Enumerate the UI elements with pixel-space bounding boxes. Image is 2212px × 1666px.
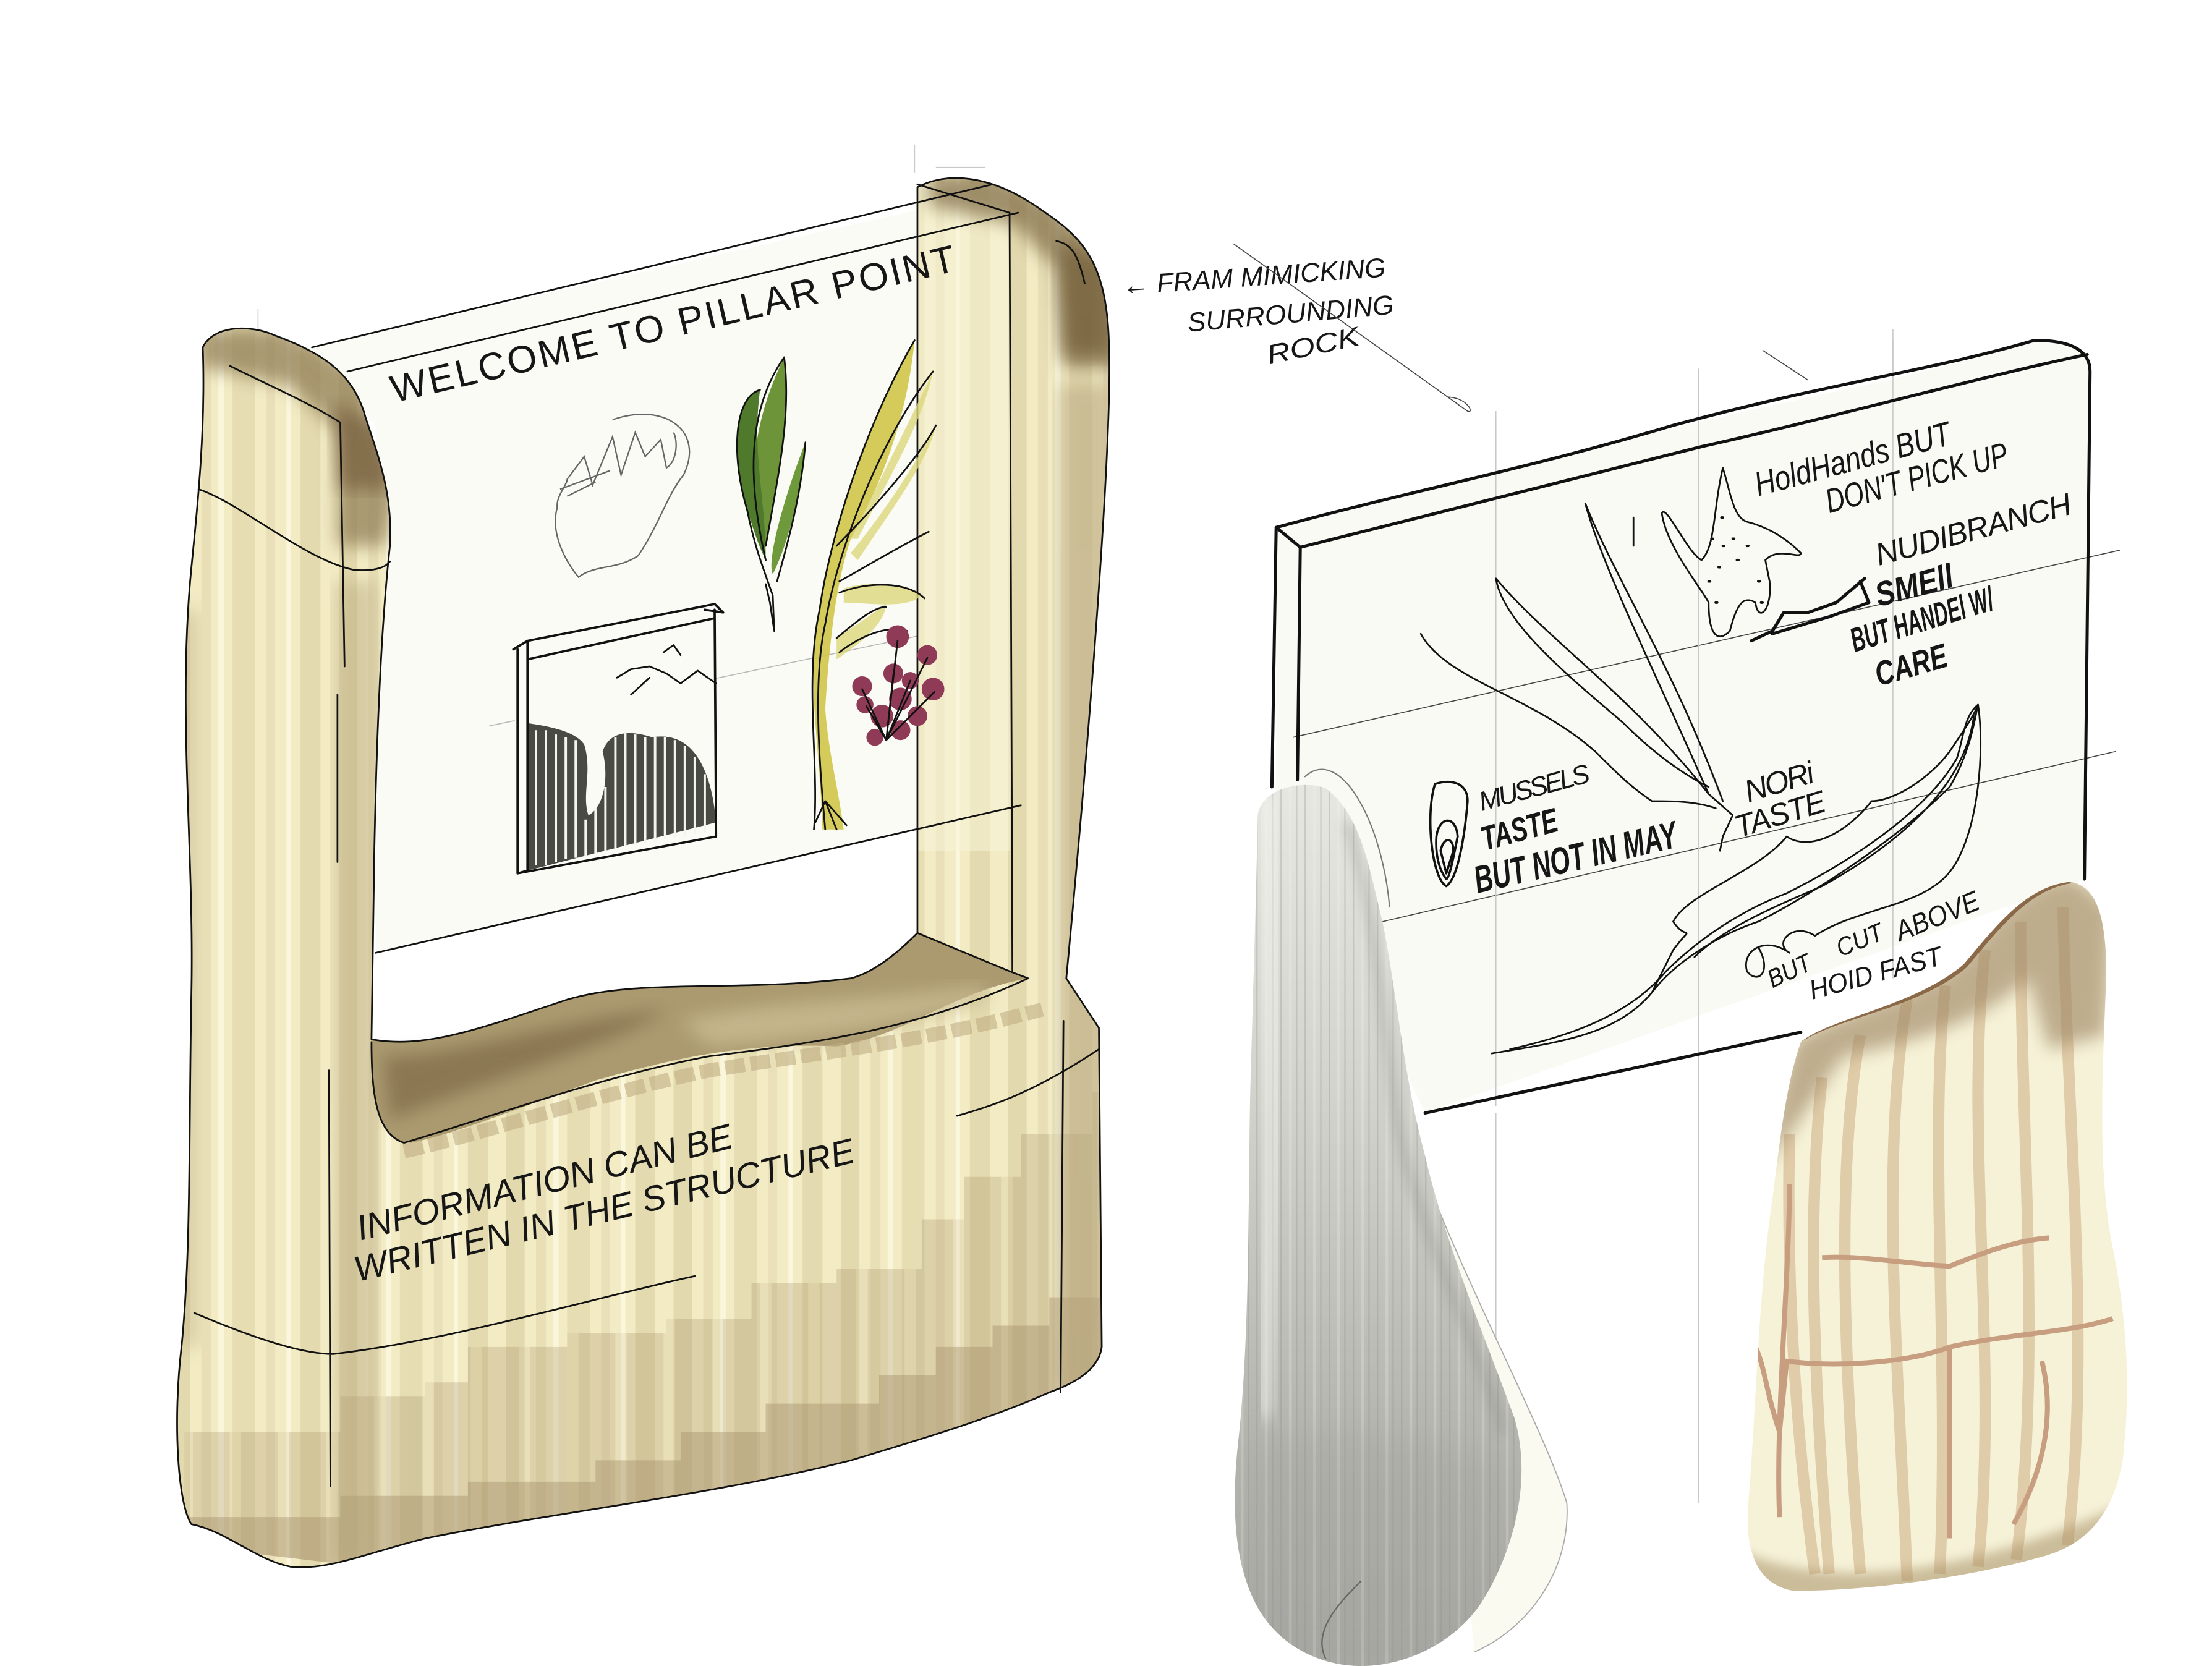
construction lines in marker (1755, 1184, 2112, 1539)
right sign labels: BUT NOT IN MAY (1470, 813, 1683, 902)
right sign labels: NUDIBRANCH (1871, 486, 2075, 572)
icon: nudibranch (1751, 579, 1869, 641)
icon: mussel (1431, 782, 1468, 886)
dark top of left ear (198, 329, 397, 546)
rock body (1235, 785, 1522, 1666)
annotation: information in the structure: INFORMATION CAN BE (352, 1116, 737, 1249)
panel sketches on left sign (350, 237, 1808, 1290)
pencil sketch: kelp outline (555, 414, 689, 577)
sign outline (1272, 340, 2090, 1113)
rock body (1747, 882, 2127, 1591)
icon: green kelp (737, 357, 806, 631)
left post shading (334, 581, 377, 1560)
right post shading (1058, 383, 1115, 1390)
annotation leader line (1233, 244, 1808, 412)
annotation: frame mimicking rock (1121, 253, 1395, 370)
right sign labels: ABOVE (1889, 884, 1984, 948)
window sill (372, 933, 1028, 1143)
right sign labels: HOID FAST (1806, 941, 1947, 1006)
lower edge shading (1744, 1503, 2127, 1602)
lower darker marker band (184, 1092, 1106, 1574)
right sign labels: BUT HANDEl W/ (1845, 579, 2000, 660)
wood base (177, 178, 1109, 1567)
pencil grid on glass (489, 635, 922, 726)
dark top of right post (929, 170, 1120, 368)
structure outline (177, 178, 1109, 1567)
panel: right sign (1272, 340, 2120, 1113)
right sign labels: SMEll (1871, 556, 1959, 614)
glass panel surface (309, 192, 1021, 953)
rock offset shadow outline (1418, 1155, 1567, 1652)
icon: long kelp (1492, 705, 1981, 1053)
icon: yellow kelp (812, 340, 936, 830)
brown marker rock (1747, 882, 2127, 1591)
right sign labels: DON'T PICK UP (1821, 435, 2012, 521)
dark brown shoulder (1758, 876, 2112, 1177)
right sign labels: NORi (1740, 754, 1819, 809)
annotation: frame mimicking rock: ← FRAM MIMICKING (1121, 253, 1387, 301)
right sign labels (1470, 414, 2075, 1006)
right sign labels: TASTE (1730, 783, 1831, 844)
icon: red algae (852, 625, 945, 746)
right sign labels: MUSSELS (1476, 759, 1593, 817)
panel: left sign glass (309, 192, 1021, 953)
icon: nori kelp (1421, 503, 1733, 851)
grey pencil rock (1219, 766, 1567, 1666)
right sign labels: CUT (1832, 917, 1889, 963)
frame contour lines (194, 184, 1099, 1486)
picture: cliff scene (513, 604, 723, 873)
left structure: wooden frame (177, 170, 1120, 1574)
title: welcome to pillar point: WELCOME TO PILLAR POINT (386, 237, 959, 411)
annotation: frame mimicking rock: ROCK (1264, 321, 1363, 370)
sign board (1276, 340, 2090, 1113)
annotation: information in the structure: WRITTEN IN THE STRUCTURE (350, 1131, 859, 1290)
right sign labels: TASTE (1476, 801, 1563, 858)
grain strokes (1789, 907, 2078, 1581)
right sign labels: HoldHands BUT (1750, 414, 1956, 503)
faint construction marks (258, 145, 1893, 1503)
sign grid lines (1293, 340, 2120, 1106)
annotation: frame mimicking rock: SURROUNDING (1186, 291, 1395, 338)
icon: starfish (1662, 468, 1801, 637)
right sign labels: CARE (1870, 636, 1953, 694)
right sign labels: BUT (1763, 948, 1818, 993)
